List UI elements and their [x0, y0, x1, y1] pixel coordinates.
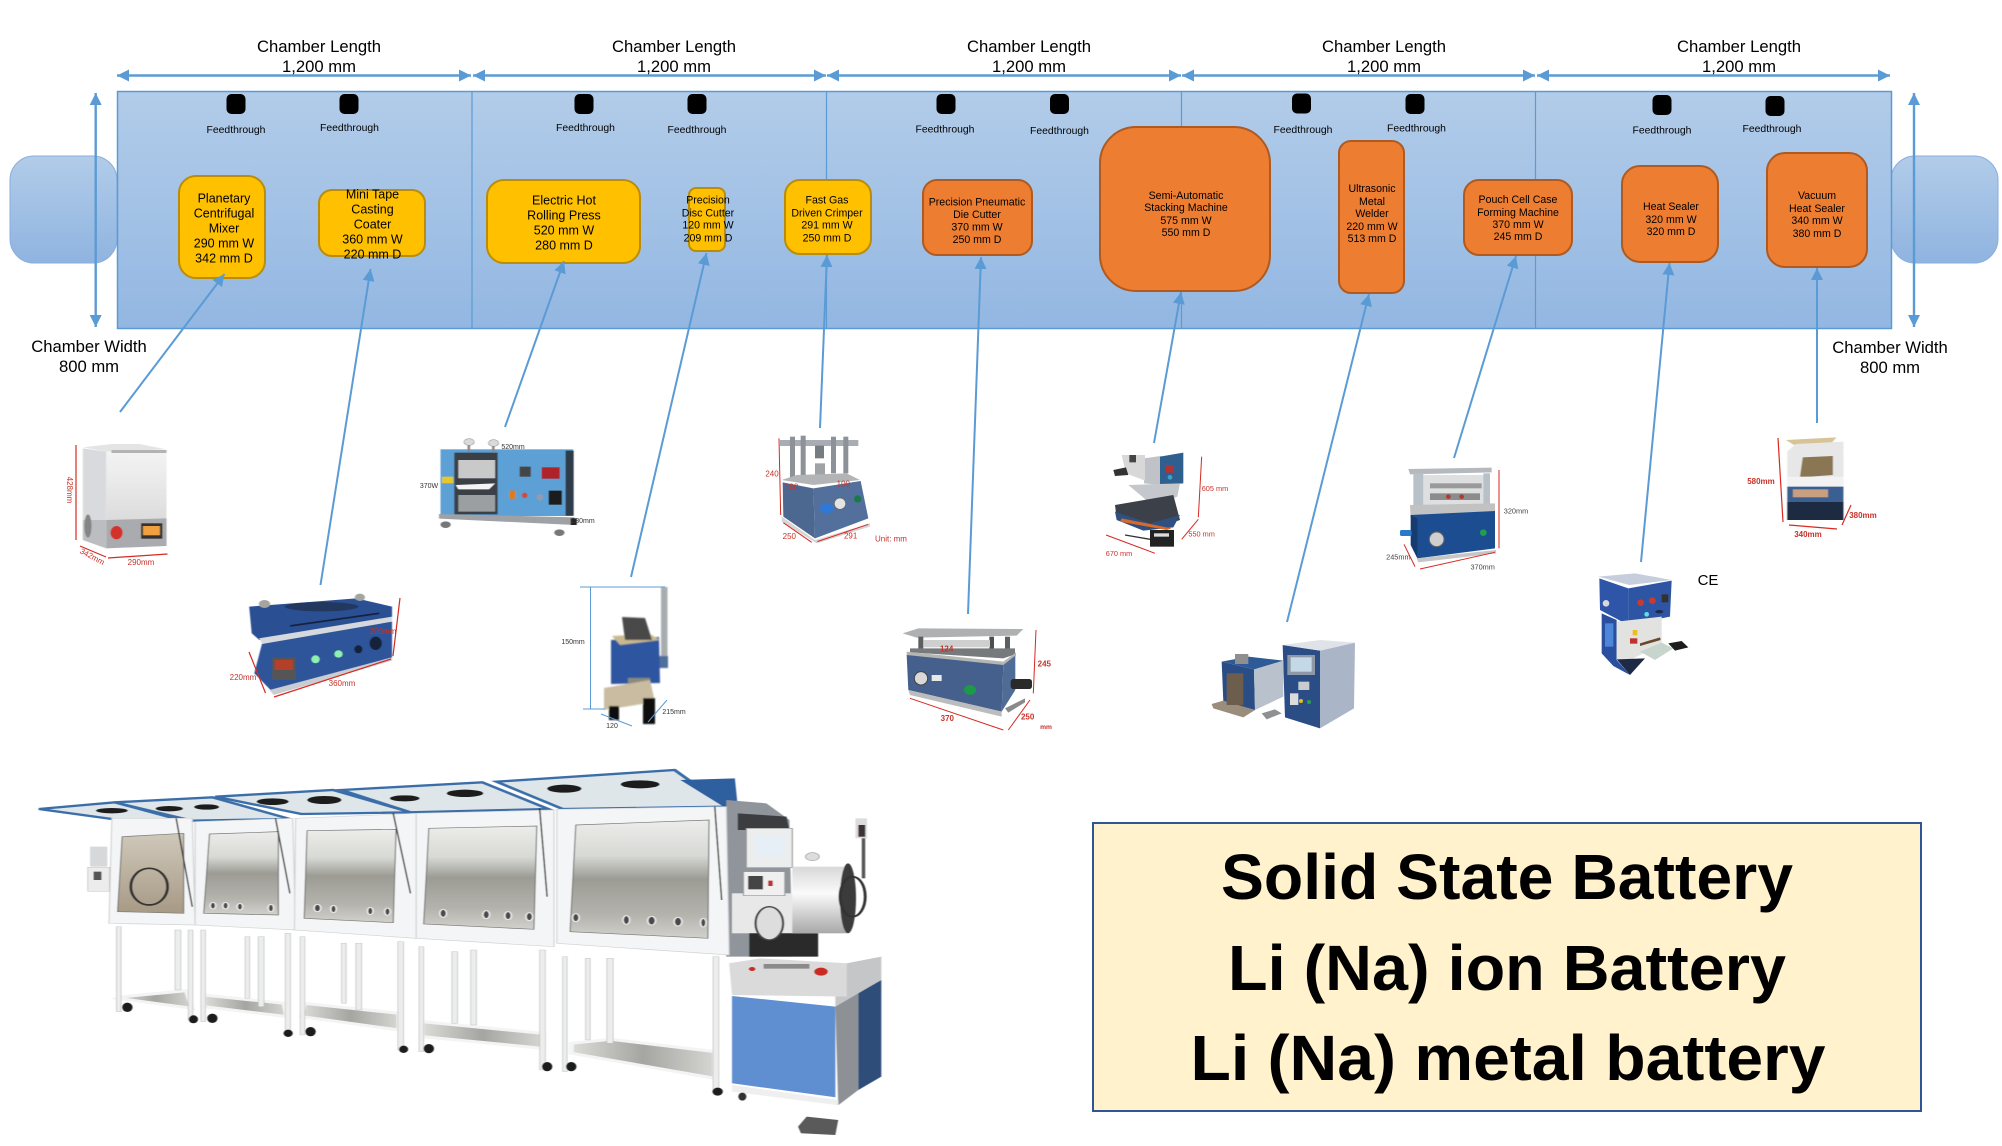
device: fast gas driven crimper: 291	[844, 531, 858, 540]
box: ultrasonic metal welder: Metal	[1359, 196, 1385, 208]
device: mini tape casting coater: 220mm	[230, 673, 257, 682]
box: precision pneumatic die cutter: Die Cutter	[953, 209, 1001, 221]
device: pouch cell case forming machine: 320mm	[1504, 506, 1528, 515]
right antechamber	[1891, 156, 1998, 263]
device: heat sealer	[1598, 573, 1688, 675]
box: fast gas driven crimper: Fast Gas	[806, 194, 848, 206]
feedthrough ports: Feedthrough	[1030, 126, 1089, 137]
touch screen panel	[746, 828, 792, 868]
box: planetary centrifugal mixer: Planetary	[198, 192, 251, 206]
box: planetary centrifugal mixer: Centrifugal	[194, 206, 254, 220]
device: fast gas driven crimper: 240	[765, 469, 779, 478]
box: precision disc cutter: 120 mm W	[682, 220, 734, 232]
box: fast gas driven crimper: 291 mm W	[801, 220, 853, 232]
temperature controller	[743, 872, 785, 896]
box: pouch cell case forming machine: 370 mm W	[1492, 219, 1544, 231]
box: planetary centrifugal mixer: 342 mm D	[195, 252, 253, 266]
arrows from equipment to chamber positions	[120, 253, 1817, 622]
device: mini tape casting coater: 360mm	[329, 679, 356, 688]
box: ultrasonic metal welder: Ultrasonic	[1348, 183, 1396, 195]
box: semi-automatic stacking machine: Stacking Machine	[1144, 202, 1228, 214]
device: fast gas driven crimper: 100	[785, 483, 799, 492]
box: mini tape casting coater: 220 mm D	[344, 248, 401, 262]
box: semi-automatic stacking machine: Semi-Automatic	[1149, 190, 1224, 202]
dimension 1: 1,200 mm	[282, 57, 356, 76]
glove ports	[210, 902, 706, 927]
title box: battery types: Solid State Battery	[1221, 841, 1793, 913]
feedthrough ports: Feedthrough	[556, 123, 615, 134]
box: planetary centrifugal mixer: Mixer	[209, 222, 239, 236]
CE mark: CE	[1698, 572, 1718, 589]
device: electric hot rolling press: 280mm	[571, 518, 595, 525]
device: pouch cell case forming machine	[1386, 468, 1528, 572]
box: precision disc cutter: 209 mm D	[684, 232, 733, 244]
dimension 4: Chamber Length	[1322, 37, 1446, 56]
device: planetary centrifugal mixer	[65, 444, 168, 567]
device: vacuum heat sealer	[1747, 437, 1877, 539]
device: electric hot rolling press	[420, 439, 595, 536]
box: mini tape casting coater: Coater	[354, 218, 391, 232]
box: precision disc cutter: Precision	[686, 194, 730, 206]
blue rear bracket	[680, 778, 738, 808]
box: planetary centrifugal mixer	[179, 176, 265, 278]
box: ultrasonic metal welder: 220 mm W	[1346, 221, 1398, 233]
title box: battery types	[1093, 823, 1921, 1111]
left side control	[90, 847, 107, 867]
box: heat sealer: 320 mm D	[1647, 226, 1696, 238]
dimension 2: 1,200 mm	[637, 57, 711, 76]
dimension 1	[117, 37, 471, 76]
box: heat sealer	[1622, 166, 1718, 262]
device: precision pneumatic die cutter: mm	[1040, 724, 1052, 731]
device: precision pneumatic die cutter: 250	[1021, 712, 1035, 721]
device: precision disc cutter	[561, 587, 686, 730]
box: ultrasonic metal welder: Welder	[1355, 208, 1389, 220]
shelves	[118, 991, 715, 1078]
windows	[118, 833, 184, 913]
box: electric hot rolling press	[487, 180, 640, 263]
box: mini tape casting coater: Mini Tape	[346, 188, 399, 202]
feedthrough ports: Feedthrough	[207, 125, 266, 136]
dimension 3: Chamber Length	[967, 37, 1091, 56]
dimension 2	[473, 37, 826, 76]
feedthrough ports: Feedthrough	[1743, 124, 1802, 135]
device: planetary centrifugal mixer: 428mm	[65, 477, 74, 504]
dimension 2: Chamber Length	[612, 37, 736, 56]
box: fast gas driven crimper	[785, 180, 871, 254]
dimension 3: 1,200 mm	[992, 57, 1066, 76]
device: mini tape casting coater: 200mm	[370, 627, 397, 636]
pole	[855, 818, 867, 838]
box: mini tape casting coater: Casting	[351, 202, 394, 216]
device: precision pneumatic die cutter: 245	[1038, 660, 1052, 669]
box: ultrasonic metal welder	[1339, 141, 1404, 293]
dimension 5: Chamber Length	[1677, 37, 1801, 56]
left antechamber	[10, 156, 117, 263]
mixer cylinder	[792, 867, 847, 933]
device: pouch cell case forming machine: 370mm	[1470, 563, 1495, 572]
box: precision disc cutter: Disc Cutter	[682, 208, 735, 220]
box: semi-automatic stacking machine: 575 mm W	[1160, 215, 1212, 227]
device: precision pneumatic die cutter	[903, 628, 1052, 731]
dimension 4	[1182, 37, 1535, 76]
box: pouch cell case forming machine: 245 mm D	[1494, 231, 1543, 243]
box: mini tape casting coater	[319, 188, 425, 262]
box: electric hot rolling press: Rolling Press	[527, 208, 601, 222]
box: electric hot rolling press: Electric Hot	[532, 194, 596, 208]
box: vacuum heat sealer	[1767, 153, 1867, 267]
device: planetary centrifugal mixer: 342mm	[78, 547, 106, 567]
feedthrough ports: Feedthrough	[320, 123, 379, 134]
box: precision pneumatic die cutter: 250 mm D	[953, 234, 1002, 246]
chamber lids	[39, 770, 726, 823]
dimension 4: 1,200 mm	[1347, 57, 1421, 76]
feedthrough ports: Feedthrough	[916, 124, 975, 136]
device: fast gas driven crimper	[765, 436, 907, 544]
device: fast gas driven crimper: Unit: mm	[875, 535, 907, 544]
lid fans	[96, 780, 660, 813]
device: vacuum heat sealer: 580mm	[1747, 477, 1775, 486]
dimension 5	[1537, 37, 1890, 76]
device: semi-automatic stacking machine	[1106, 453, 1228, 558]
chamber length dimensions	[117, 37, 1890, 76]
dimension 3	[827, 37, 1181, 76]
device: semi-automatic stacking machine: 670 mm	[1106, 549, 1132, 558]
dimension 5: 1,200 mm	[1702, 57, 1776, 76]
device: vacuum heat sealer: 340mm	[1794, 530, 1822, 539]
box: vacuum heat sealer: 340 mm W	[1791, 215, 1843, 227]
feedthrough ports: Feedthrough	[1387, 124, 1446, 134]
foot pedal	[798, 1117, 838, 1135]
device: fast gas driven crimper: 250	[783, 532, 797, 541]
chamber width left: 800 mm	[59, 357, 119, 376]
box: precision pneumatic die cutter: Precision Pneumatic	[929, 196, 1026, 208]
box: fast gas driven crimper: 250 mm D	[803, 232, 852, 244]
stand legs	[116, 927, 719, 1093]
rear mechanism	[726, 800, 792, 957]
device: vacuum heat sealer: 380mm	[1849, 511, 1877, 520]
box: ultrasonic metal welder: 513 mm D	[1348, 233, 1397, 245]
box: pouch cell case forming machine	[1464, 180, 1572, 255]
title box: battery types: Li (Na) metal battery	[1190, 1022, 1826, 1094]
chamber width right: 800 mm	[1860, 358, 1920, 377]
box: electric hot rolling press: 520 mm W	[534, 224, 594, 238]
box: precision disc cutter	[682, 188, 735, 251]
device: precision disc cutter: 150mm	[561, 639, 585, 646]
device: electric hot rolling press: 520mm	[501, 444, 525, 451]
feedthrough ports: Feedthrough	[1633, 126, 1692, 136]
photo: five-chamber glovebox line	[39, 770, 881, 1135]
device: precision pneumatic die cutter: 124	[940, 644, 954, 653]
device: electric hot rolling press: 370W	[420, 483, 439, 490]
chamber width right	[1832, 93, 1948, 377]
device: mini tape casting coater	[230, 594, 400, 697]
winding wheel inside first window	[131, 868, 168, 905]
casters	[122, 1003, 723, 1096]
box: precision pneumatic die cutter	[923, 180, 1032, 255]
device: semi-automatic stacking machine: 605 mm	[1202, 484, 1228, 493]
box: heat sealer: Heat Sealer	[1643, 201, 1699, 213]
box: vacuum heat sealer: 380 mm D	[1793, 228, 1842, 240]
chamber width left: Chamber Width	[31, 337, 147, 356]
gas struts	[176, 807, 722, 907]
box: mini tape casting coater: 360 mm W	[342, 232, 403, 246]
box: fast gas driven crimper: Driven Crimper	[791, 208, 863, 220]
box: vacuum heat sealer: Heat Sealer	[1789, 203, 1845, 215]
box: planetary centrifugal mixer: 290 mm W	[194, 236, 254, 250]
box: pouch cell case forming machine: Pouch Cell Case	[1479, 194, 1558, 206]
box: precision pneumatic die cutter: 370 mm W	[951, 222, 1003, 234]
device: precision disc cutter: 215mm	[662, 709, 686, 716]
feedthrough ports: Feedthrough	[668, 125, 727, 136]
dimension 1: Chamber Length	[257, 37, 381, 56]
device: semi-automatic stacking machine: 550 mm	[1188, 529, 1215, 538]
device: ultrasonic metal welder	[1212, 640, 1355, 728]
box: electric hot rolling press: 280 mm D	[535, 238, 593, 252]
chamber width left	[31, 93, 147, 376]
glovebox chamber	[118, 92, 1892, 328]
box: vacuum heat sealer: Vacuum	[1798, 190, 1836, 202]
device: precision pneumatic die cutter: 370	[941, 714, 955, 723]
device: fast gas driven crimper: 100	[837, 479, 851, 488]
device: precision disc cutter: 120	[606, 723, 618, 730]
white chamber panels	[109, 807, 729, 955]
box: heat sealer: 320 mm W	[1645, 214, 1697, 226]
box: pouch cell case forming machine: Forming Machine	[1477, 207, 1559, 219]
control cabinet	[835, 957, 881, 1007]
chamber width right: Chamber Width	[1832, 338, 1948, 357]
feedthrough ports	[207, 94, 1802, 137]
feedthrough ports: Feedthrough	[1274, 125, 1333, 136]
box: semi-automatic stacking machine	[1100, 127, 1270, 291]
device: pouch cell case forming machine: 245mm	[1386, 552, 1411, 561]
box: semi-automatic stacking machine: 550 mm D	[1162, 227, 1211, 239]
title box: battery types: Li (Na) ion Battery	[1228, 932, 1786, 1004]
device: planetary centrifugal mixer: 290mm	[128, 558, 155, 567]
